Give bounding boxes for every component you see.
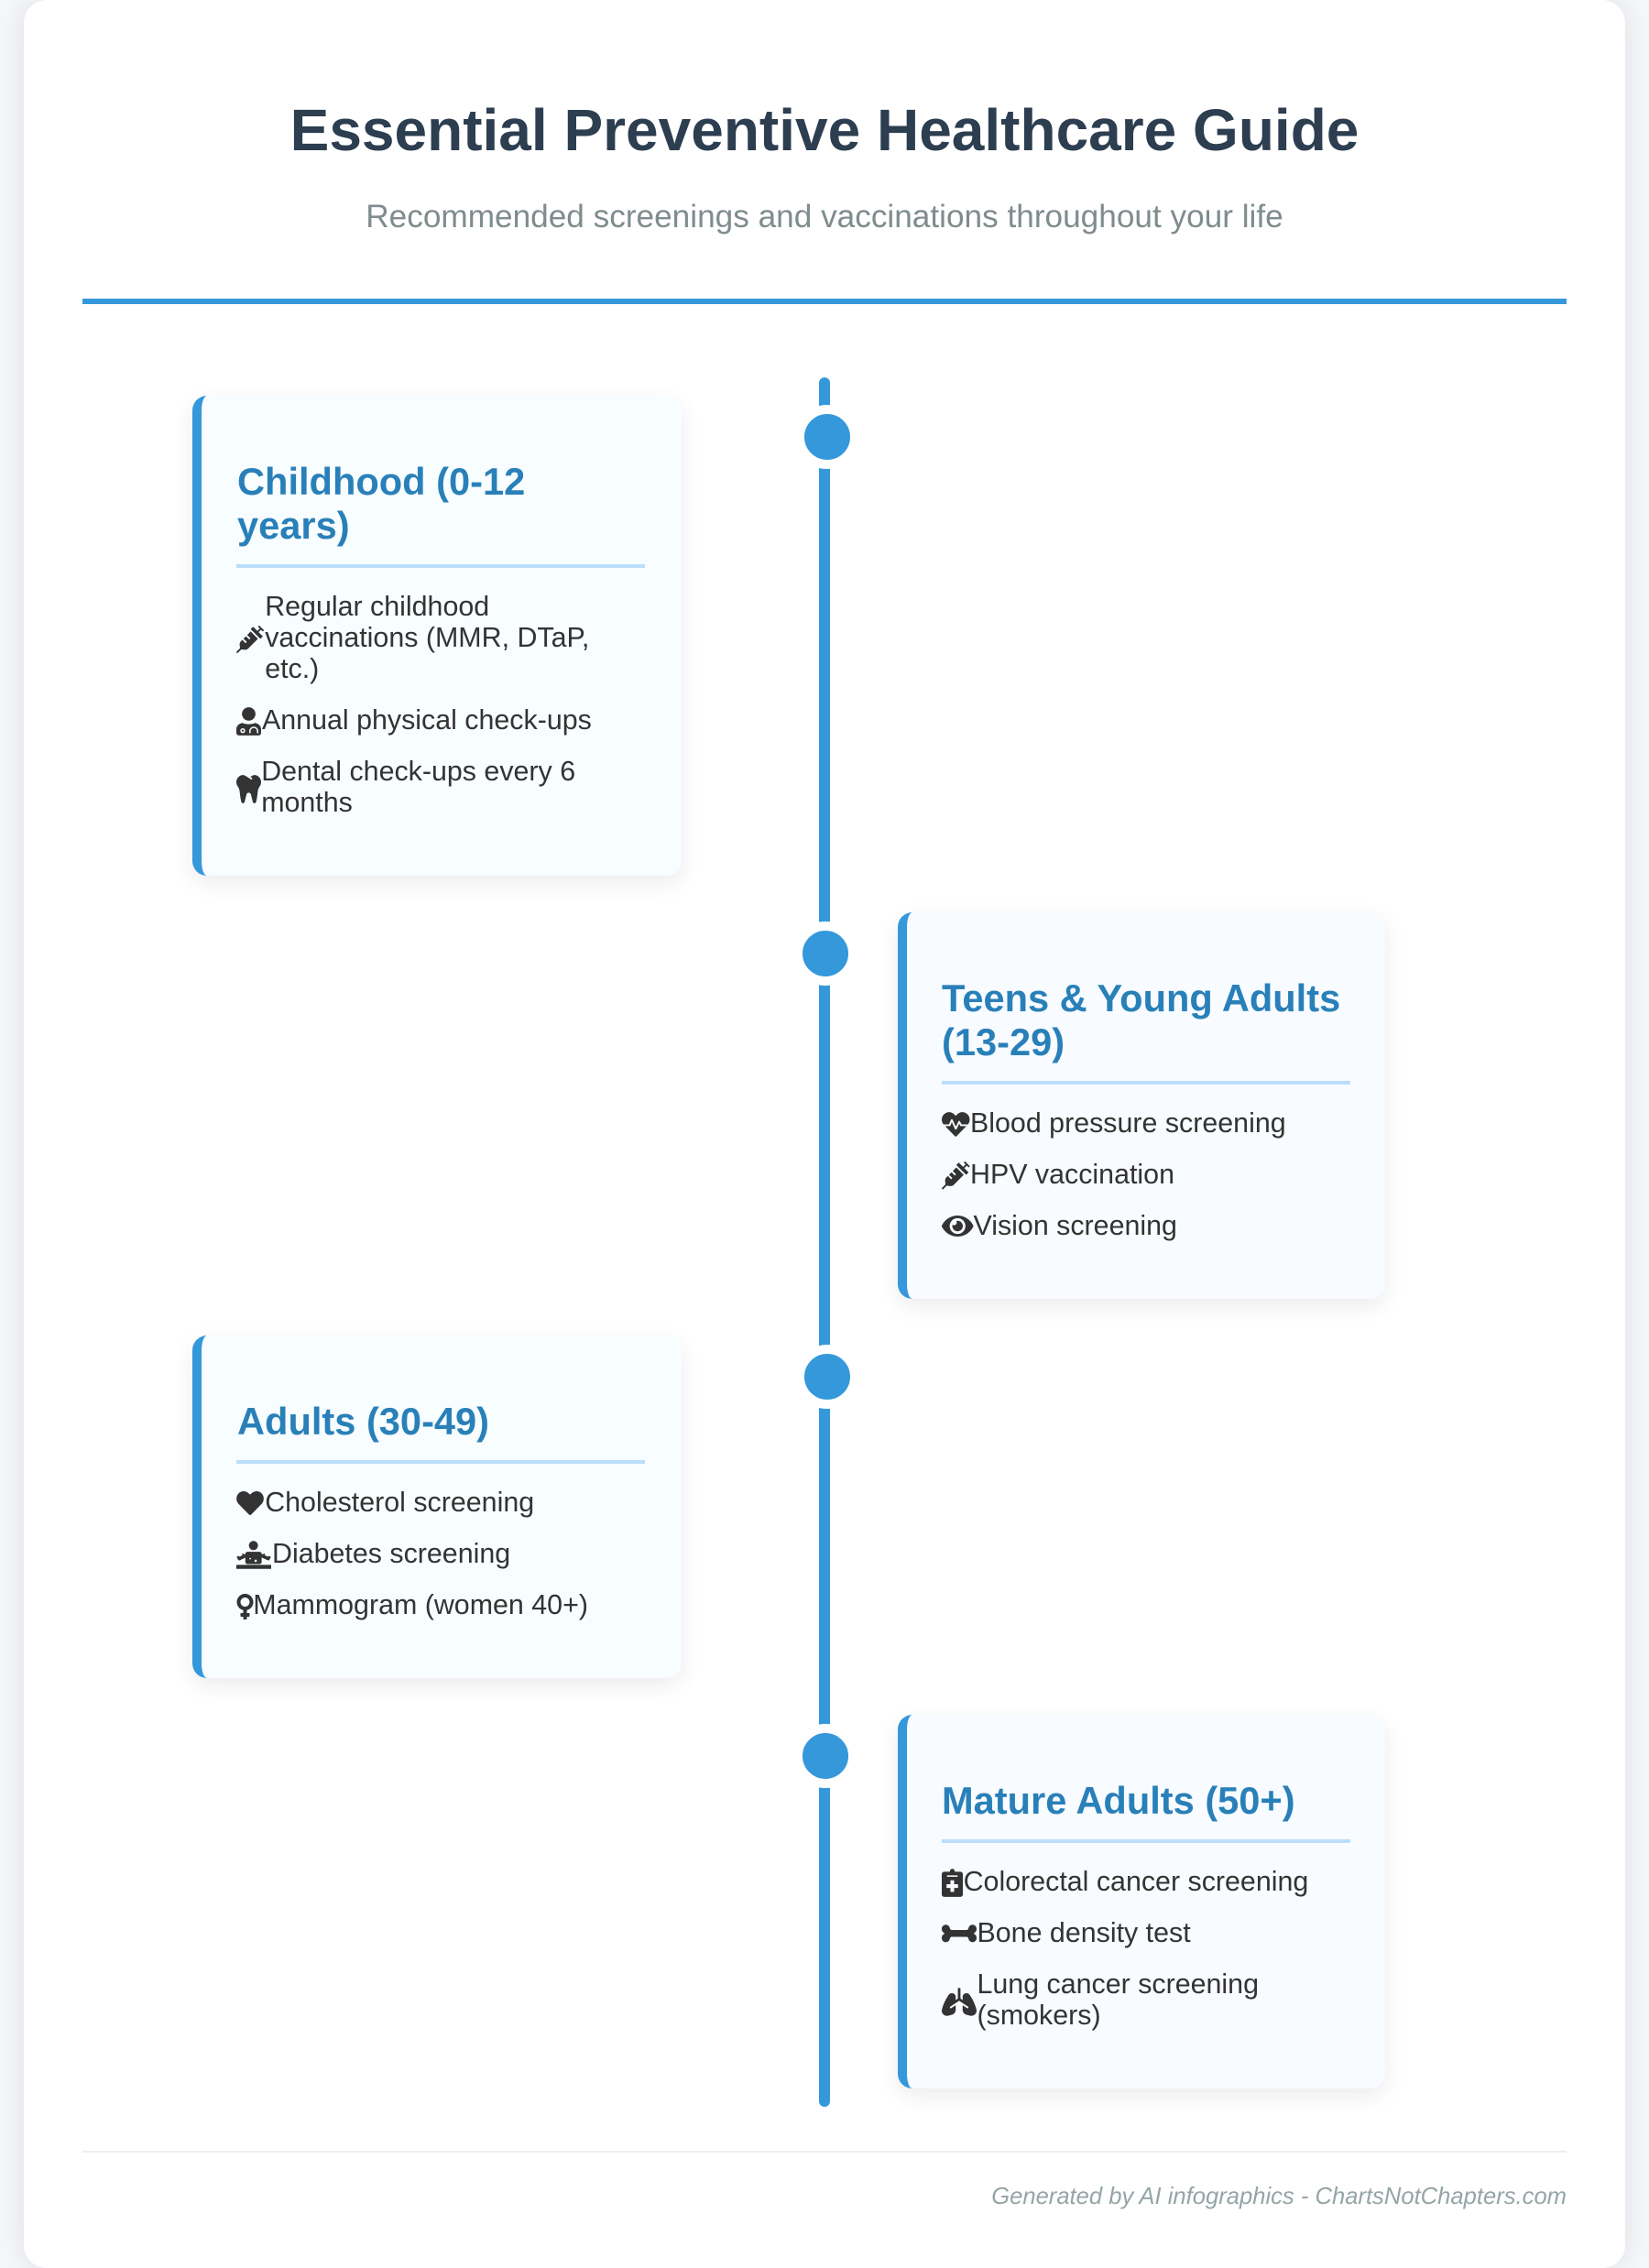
panel: mature adults — [898, 1715, 1385, 2088]
item: colorectal: Colorectal cancer screening — [964, 1865, 1308, 1896]
heading: childhood: Childhood (0-12 — [237, 460, 525, 503]
timeline marker 3 — [795, 1345, 859, 1409]
title: Essential Preventive Healthcare Guide — [290, 97, 1359, 163]
item: vision screening: Vision screening — [973, 1209, 1177, 1240]
item: childhood vaccinations: etc.) — [265, 652, 319, 683]
item: lung cancer: Lung cancer screening — [977, 1968, 1259, 1999]
item: physical check-ups: Annual physical check-ups — [262, 703, 592, 735]
item: bone density: Bone density test — [977, 1916, 1191, 1947]
heading: teens and young adults: Teens & Young Adults — [942, 976, 1340, 1020]
heading: mature adults: Mature Adults (50+) — [942, 1779, 1295, 1822]
heading: teens and young adults: (13-29) — [942, 1020, 1065, 1063]
item: mammogram: Mammogram (women 40+) — [253, 1588, 588, 1619]
item: dental check-ups — [236, 756, 575, 818]
footer credit: Generated by AI infographics - ChartsNotChapters.com — [991, 2184, 1567, 2209]
item: childhood vaccinations: vaccinations (MMR, DTaP, — [265, 621, 589, 652]
panel: childhood — [192, 396, 682, 876]
item: diabetes: Diabetes screening — [272, 1537, 510, 1568]
item: lung cancer: (smokers) — [977, 1999, 1101, 2030]
item: cholesterol: Cholesterol screening — [265, 1486, 534, 1517]
item: HPV vaccination: HPV vaccination — [970, 1158, 1174, 1189]
item: dental check-ups: Dental check-ups every 6 — [261, 756, 575, 787]
heading: childhood: years) — [237, 504, 350, 547]
heading: teens and young adults — [942, 976, 1340, 1063]
timeline marker 2 — [793, 921, 857, 986]
subtitle: Recommended screenings and vaccinations throughout your life — [366, 199, 1283, 234]
timeline line — [819, 377, 830, 2107]
panel: adults — [192, 1336, 682, 1678]
heading: adults: Adults (30-49) — [237, 1400, 489, 1443]
heading: childhood — [237, 460, 525, 547]
timeline marker 1 — [795, 405, 859, 469]
item: childhood vaccinations — [236, 590, 589, 683]
item: blood pressure: Blood pressure screening — [970, 1107, 1286, 1138]
item: dental check-ups: months — [261, 787, 353, 818]
timeline marker 4 — [793, 1724, 857, 1788]
item: childhood vaccinations: Regular childhood — [265, 590, 489, 621]
panel: teens and young adults — [898, 912, 1385, 1299]
item: lung cancer — [942, 1968, 1259, 2030]
